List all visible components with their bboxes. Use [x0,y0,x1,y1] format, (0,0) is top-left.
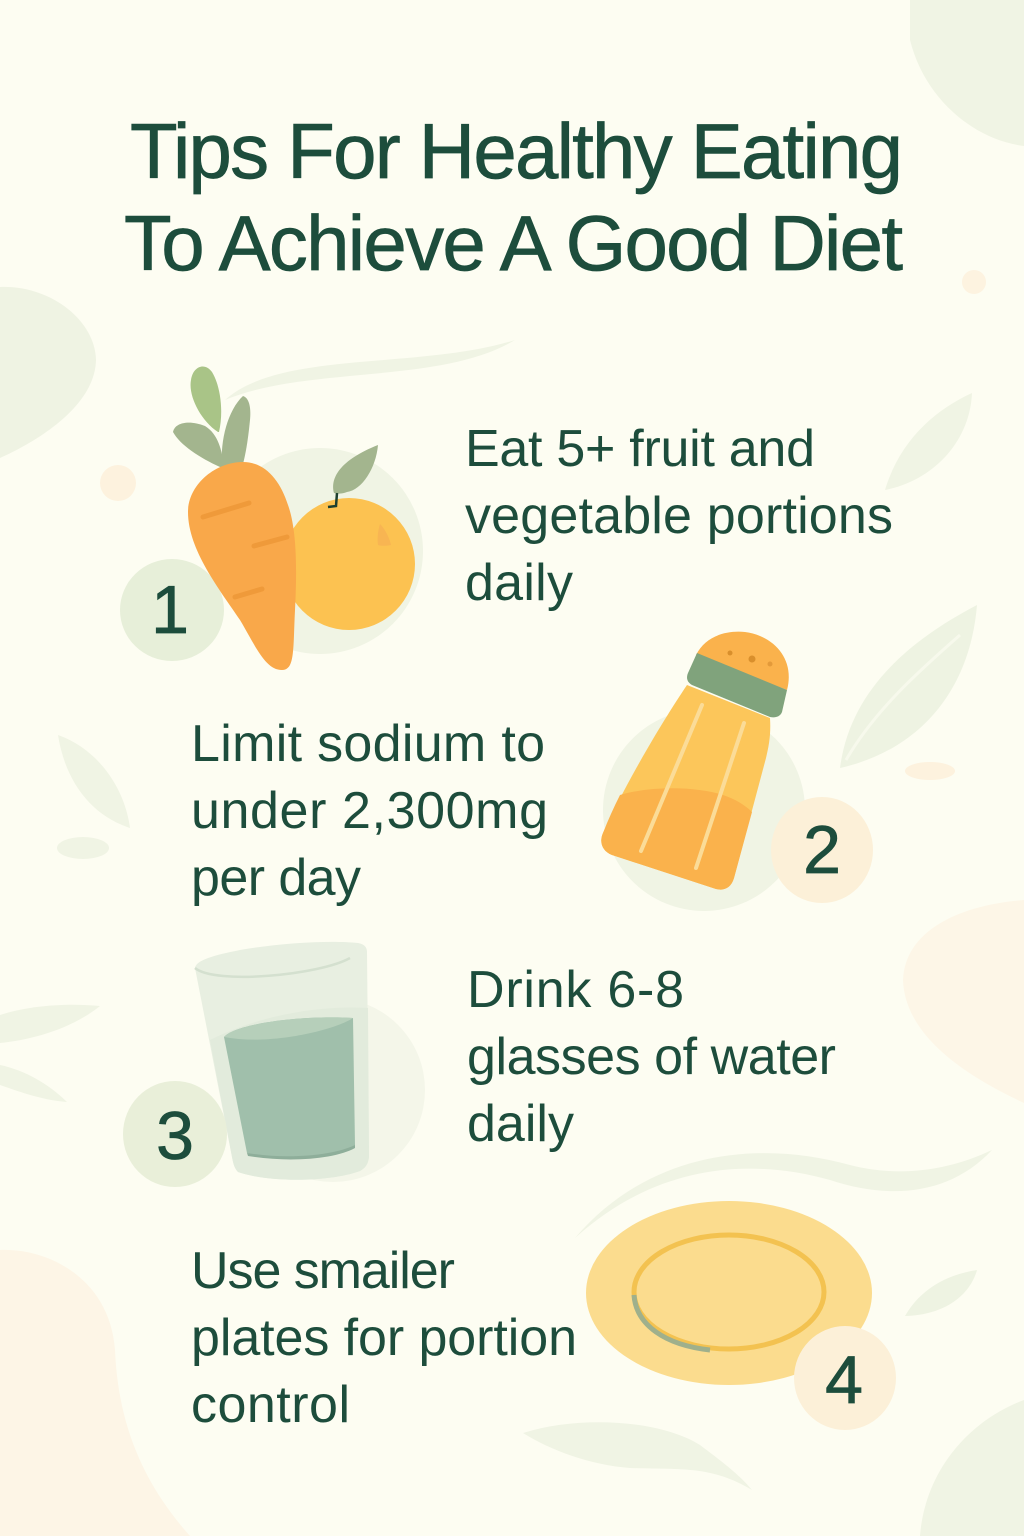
badge 2: 2 [803,812,841,888]
tip 1 text: daily [465,554,573,612]
icon: salt shaker [601,632,805,911]
tip 3 text: daily [467,1095,574,1153]
tip 2 text: per day [191,849,361,907]
tip 1 text: vegetable portions [465,487,893,545]
tip 3 text: Drink 6-8 [467,961,684,1019]
badge 3: 3 [156,1098,194,1174]
tip 4 text: control [191,1376,350,1434]
title: To Achieve A Good Diet [124,199,903,287]
tip 4 text: Use smailer [191,1242,455,1300]
tip 2 text: under 2,300mg [191,782,548,840]
badge 4: 4 [825,1342,863,1418]
tip 1 text: Eat 5+ fruit and [465,420,815,478]
badge 2 [771,797,873,903]
tip 2 text: Limit sodium to [191,715,545,773]
tip 3 text: glasses of water [467,1028,836,1086]
badge 1: 1 [151,572,189,648]
tip 4 text [191,1242,577,1434]
tip 3 text [467,961,836,1153]
title: Tips For Healthy Eating [130,107,903,195]
title [124,107,903,287]
tip 1 text [465,420,893,612]
tip 4 text: plates for portion [191,1309,577,1367]
icon: water glass [195,942,425,1182]
badge 3 [123,1081,227,1187]
tip 2 text [191,715,548,907]
badge 4 [794,1326,896,1430]
icon: carrot and orange [173,366,423,670]
icon: plate [586,1201,872,1385]
badge 1 [120,559,224,661]
